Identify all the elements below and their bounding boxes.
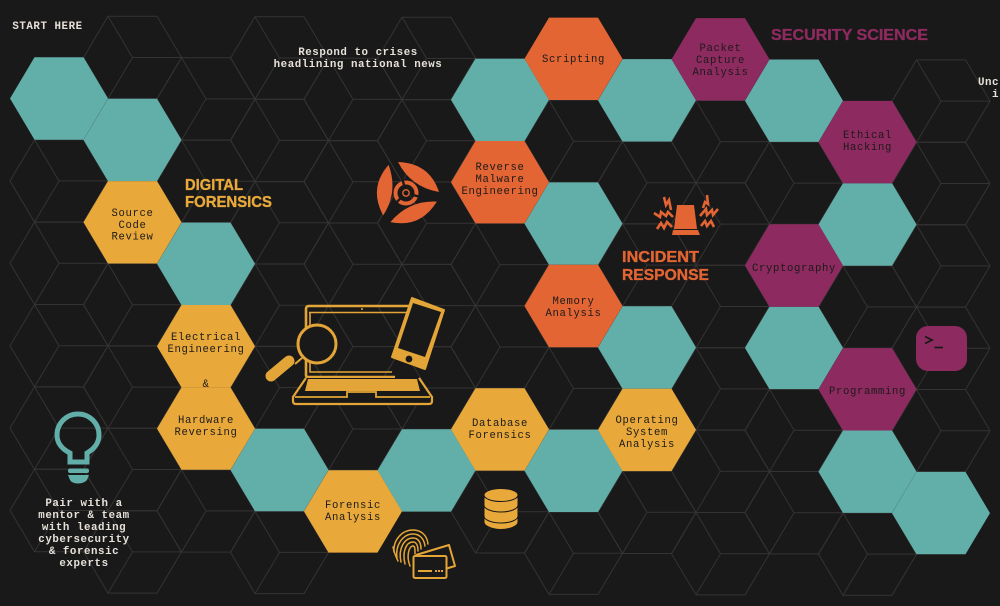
hexagon: Programming: Programming xyxy=(829,386,906,398)
hexagon: Ethical Hacking: Hacking xyxy=(843,142,892,154)
hexagon: Database Forensics xyxy=(451,388,549,471)
mentor text: & forensic xyxy=(49,546,119,558)
hexagon: Hardware Reversing: Reversing xyxy=(174,427,238,439)
icon: biohazard xyxy=(363,162,439,237)
hexagon: Source Code Review xyxy=(84,181,182,264)
hexagon: Electrical Engineering: Electrical xyxy=(171,332,241,344)
hexagon: Packet Capture Analysis xyxy=(672,18,770,100)
icon: fingerprint xyxy=(393,530,428,566)
hexagon: Packet Capture Analysis: Analysis xyxy=(692,67,749,79)
hexagon: Packet Capture Analysis: Capture xyxy=(696,55,745,67)
hexagon: Operating System Analysis: System xyxy=(626,427,668,439)
laptop base xyxy=(293,378,432,404)
hexagon: Reverse Malware Engineering: Engineering xyxy=(461,186,539,198)
hexagon: Source Code Review: Source xyxy=(111,208,154,220)
heading: digital forensics: DIGITAL xyxy=(185,177,243,194)
hexagon: Memory Analysis: Analysis xyxy=(545,308,602,320)
hexagon: Operating System Analysis: Operating xyxy=(615,415,679,427)
crisis text: Respond to crises xyxy=(298,47,418,59)
icon: lightbulb xyxy=(57,414,99,484)
hexagon: Cryptography: Cryptography xyxy=(752,263,836,275)
hexagon: Forensic Analysis: Analysis xyxy=(325,512,381,524)
clipped text at right edge: i xyxy=(992,89,999,101)
hexagon: Operating System Analysis: Analysis xyxy=(619,439,675,451)
hexagon: Source Code Review: Code xyxy=(118,220,147,232)
hexagon: Ethical Hacking: Ethical xyxy=(843,130,892,142)
hexagon: Operating System Analysis xyxy=(598,389,696,471)
icon: siren xyxy=(654,195,718,235)
hexagon: Hardware Reversing: Hardware xyxy=(178,415,234,427)
phone xyxy=(392,298,444,369)
start here label: START HERE xyxy=(12,21,83,33)
clipped text at right edge: Unc xyxy=(978,77,999,89)
mentor text: with leading xyxy=(42,522,126,534)
hexagon: Hardware Reversing: & xyxy=(202,379,210,391)
hexagon: Reverse Malware Engineering: Malware xyxy=(475,174,525,186)
hexagon: Memory Analysis: Memory xyxy=(552,296,595,308)
mentor text: mentor & team xyxy=(38,510,130,522)
hexagon: Reverse Malware Engineering xyxy=(451,141,549,223)
hexagon: Ethical Hacking xyxy=(818,101,916,183)
hexagon: Hardware Reversing xyxy=(157,379,255,470)
hexagon: Source Code Review: Review xyxy=(111,232,154,244)
mentor text: Pair with a xyxy=(45,498,123,510)
hexagon: Database Forensics: Forensics xyxy=(468,430,532,442)
hexagon: Database Forensics: Database xyxy=(472,418,528,430)
hexagon: Electrical Engineering: Engineering xyxy=(167,344,245,356)
hexagon: Forensic Analysis xyxy=(304,470,402,553)
mentor text: cybersecurity xyxy=(38,534,130,546)
heading: incident response: RESPONSE xyxy=(622,267,709,284)
icon: terminal xyxy=(916,326,967,371)
hexagon: Reverse Malware Engineering: Reverse xyxy=(475,162,525,174)
heading: security science: SECURITY SCIENCE xyxy=(771,27,928,44)
hexagon: Memory Analysis xyxy=(524,265,622,347)
hexagon: Packet Capture Analysis: Packet xyxy=(699,43,742,55)
crisis text: headlining national news xyxy=(274,59,442,71)
heading: digital forensics: FORENSICS xyxy=(185,194,272,211)
hexagon: Electrical Engineering xyxy=(157,305,255,387)
icon: payment cards xyxy=(414,545,455,578)
hexagon: Programming xyxy=(818,348,916,430)
hexagon: Forensic Analysis: Forensic xyxy=(325,500,381,512)
mentor text: experts xyxy=(59,558,109,570)
hexagon: Cryptography xyxy=(745,224,843,307)
hexagon: Scripting: Scripting xyxy=(542,54,605,66)
laptop screen xyxy=(306,306,413,377)
icon: database xyxy=(484,488,518,530)
magnifier xyxy=(298,325,336,363)
hexagon: Scripting xyxy=(524,18,622,100)
heading: incident response: INCIDENT xyxy=(622,249,699,266)
icon: laptop, phone and magnifier xyxy=(271,298,444,404)
